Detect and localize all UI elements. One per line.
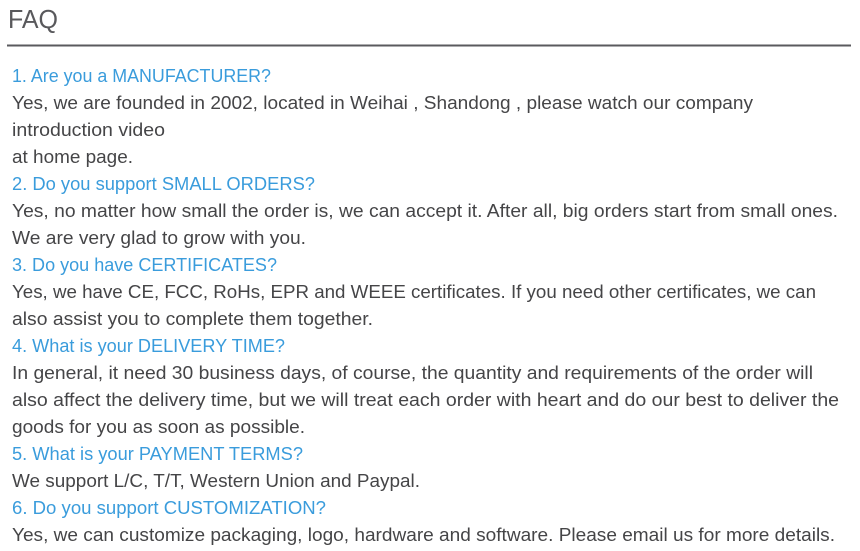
question 2: 2. Do you support SMALL ORDERS? [12,174,315,194]
question 4: 4. What is your DELIVERY TIME? [12,336,285,356]
answer 2: We are very glad to grow with you. [12,228,306,248]
FAQ item 4 [12,336,839,437]
answer 2 [12,201,838,248]
answer 3 [12,282,816,329]
FAQ item 1 [12,66,753,167]
title: FAQ [8,4,58,34]
answer 6: Yes, we can customize packaging, logo, hardware and software. Please email us for more details. [12,525,835,545]
answer 1: Yes, we are founded in 2002, located in Weihai , Shandong , please watch our company [12,93,753,113]
answer 4: goods for you as soon as possible. [12,417,305,437]
FAQ item 2 [12,174,838,248]
FAQ item 5 [12,444,420,491]
FAQ item 6 [12,498,835,545]
answer 4: also affect the delivery time, but we will treat each order with heart and do our best to deliver the [12,390,839,410]
question 1: 1. Are you a MANUFACTURER? [12,66,271,86]
answer 4: In general, it need 30 business days, of course, the quantity and requirements of the order will [12,363,813,383]
answer 4 [12,363,839,437]
answer 1: at home page. [12,147,133,167]
question 6: 6. Do you support CUSTOMIZATION? [12,498,326,518]
answer 3: Yes, we have CE, FCC, RoHs, EPR and WEEE certificates. If you need other certificates, we can [12,282,816,302]
FAQ item 3 [12,255,816,329]
answer 1 [12,93,753,167]
answer 1: introduction video [12,120,165,140]
answer 3: also assist you to complete them together. [12,309,373,329]
question 3: 3. Do you have CERTIFICATES? [12,255,277,275]
answer 2: Yes, no matter how small the order is, we can accept it. After all, big orders start from small ones. [12,201,838,221]
answer 5: We support L/C, T/T, Western Union and Paypal. [12,471,420,491]
question 5: 5. What is your PAYMENT TERMS? [12,444,303,464]
